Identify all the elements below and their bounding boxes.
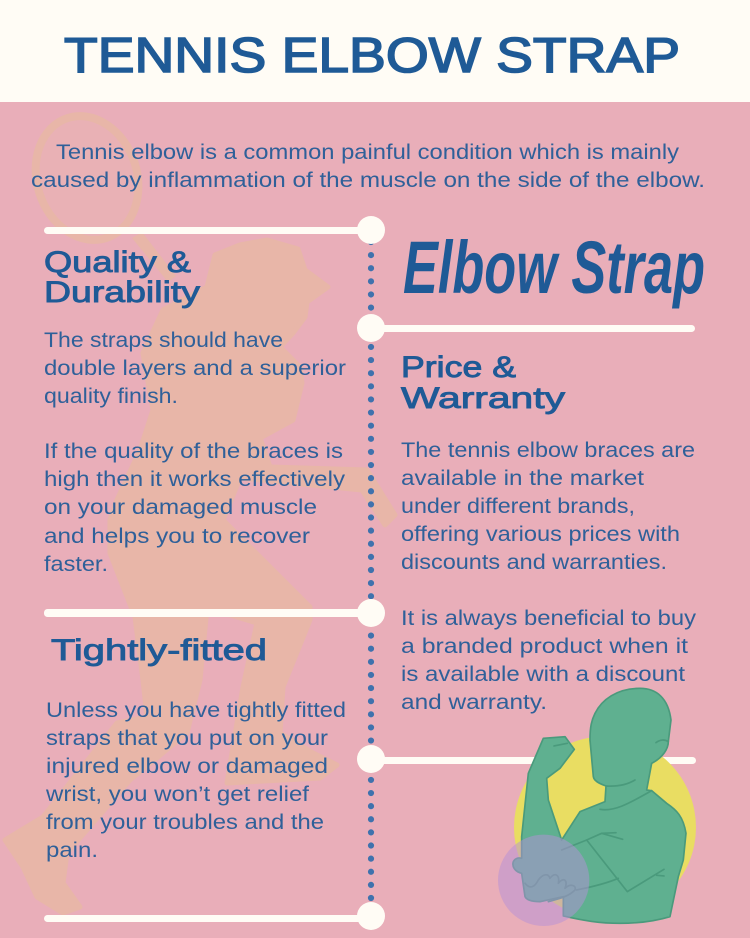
illustration: person holding sore elbow <box>498 688 696 926</box>
green figure <box>513 688 686 923</box>
body text: quality: high then it works effectively <box>44 468 346 491</box>
figure detail lines <box>525 740 668 902</box>
body text: tightly fitted: pain. <box>46 839 98 862</box>
body text: tightly fitted <box>45 699 346 862</box>
body text: price: The tennis elbow braces are <box>401 439 695 462</box>
heading: quality and durability: Durability <box>44 276 200 309</box>
body text: price: offering various prices with <box>401 523 680 546</box>
intro text: Tennis elbow is a common painful condition which is mainly <box>56 141 680 164</box>
heading: price and warranty <box>401 351 565 415</box>
body text: tightly fitted: wrist, you won’t get relief <box>45 783 309 806</box>
panel: price and warranty <box>401 351 697 714</box>
body text: quality: quality finish. <box>44 385 178 408</box>
body text: tightly fitted: from your troubles and the <box>46 811 324 834</box>
body text: quality <box>44 329 346 576</box>
body text: tightly fitted: Unless you have tightly fitted <box>46 699 346 722</box>
panel: quality and durability <box>44 246 346 576</box>
body text: quality: double layers and a superior <box>44 357 346 380</box>
body text: price: discounts and warranties. <box>401 551 667 574</box>
heading: quality and durability <box>44 246 200 309</box>
body text: price: and warranty. <box>401 691 547 714</box>
purple highlight circle <box>498 835 589 926</box>
intro text: caused by inflammation of the muscle on the side of the elbow. <box>31 169 705 192</box>
body text: tightly fitted: straps that you put on your <box>46 727 328 750</box>
dotted timeline <box>368 242 374 905</box>
body text: quality: If the quality of the braces is <box>44 440 343 463</box>
body text: quality: faster. <box>44 553 108 576</box>
body text: quality: on your damaged muscle <box>44 496 317 519</box>
panel: tightly fitted <box>45 634 346 862</box>
body text: price: It is always beneficial to buy <box>401 607 697 630</box>
body text: quality: The straps should have <box>44 329 283 352</box>
body text: price: under different brands, <box>401 495 635 518</box>
heading: price and warranty: Price & <box>401 351 516 384</box>
heading: tightly fitted: Tightly-fitted <box>51 634 267 667</box>
intro text <box>31 141 705 192</box>
heading: price and warranty: Warranty <box>401 382 565 415</box>
timeline connectors <box>44 216 696 930</box>
body text: quality: and helps you to recover <box>44 525 310 548</box>
yellow circle <box>514 736 696 918</box>
body text: price: a branded product when it <box>401 635 688 658</box>
heading: quality and durability: Quality & <box>44 246 191 279</box>
body text: price: is available with a discount <box>401 663 685 686</box>
background: tennis player silhouette <box>5 103 395 913</box>
body text: price: available in the market <box>401 467 644 490</box>
body text: tightly fitted: injured elbow or damaged <box>46 755 328 778</box>
header band <box>0 0 750 102</box>
body text: price <box>401 439 697 714</box>
title: TENNIS ELBOW STRAP <box>64 29 680 83</box>
